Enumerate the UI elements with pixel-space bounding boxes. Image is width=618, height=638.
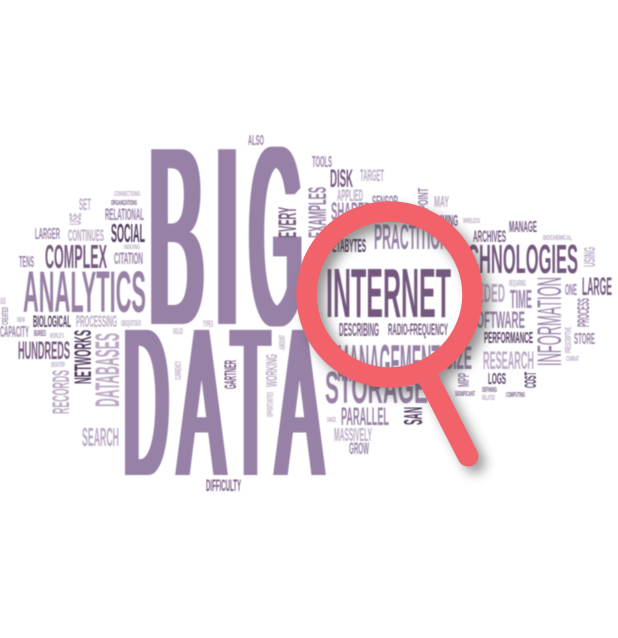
heading word: BIG: I — [214, 94, 240, 378]
word cloud: left cluster: RECORDS — [48, 370, 75, 414]
word cloud: right cluster: USING — [582, 247, 599, 267]
word cloud: left cluster: TYPES — [203, 319, 213, 329]
word cloud: left cluster: OPPORTUNITIES — [266, 392, 275, 417]
word cloud: right cluster: PRESCRIPTIVE — [564, 327, 573, 353]
word cloud: left cluster: AMOUNT — [278, 335, 287, 350]
word cloud: left cluster: WORLD'S — [50, 333, 64, 340]
word cloud: right cluster: COMBAT — [566, 356, 579, 363]
word cloud: left cluster: PROCESSING — [76, 312, 117, 331]
word cloud: left cluster: ANALYTICS — [23, 260, 146, 325]
text: G — [250, 94, 302, 378]
word cloud: left cluster: SOLID — [173, 327, 183, 336]
word cloud: left cluster: ALSO — [248, 133, 264, 149]
word cloud: left cluster: RELATIONAL — [105, 205, 144, 224]
word cloud: right cluster: SINCE — [327, 417, 336, 424]
word cloud: right cluster: REQUIRING — [509, 279, 526, 288]
word cloud: left cluster — [0, 133, 302, 495]
word cloud: right cluster: SOFTWARE — [470, 307, 525, 334]
word cloud: right cluster: SIGNIFICANT — [455, 391, 475, 398]
word cloud: left cluster: EVERY — [274, 207, 302, 238]
word cloud: right cluster: SAN — [398, 407, 428, 425]
word cloud: left cluster: GARTNER — [221, 360, 240, 389]
heading word: DATA: A — [179, 284, 224, 520]
word cloud: right cluster: BIOCHEMICAL — [543, 235, 572, 242]
lens words: DESCRIBING — [339, 320, 379, 340]
word cloud: right cluster: TIME — [510, 284, 532, 314]
word cloud: left cluster: DESKTOP — [51, 362, 65, 369]
word cloud: right cluster: TOOLS — [312, 154, 332, 171]
word cloud: right cluster: TARGET — [360, 166, 384, 185]
heading word: DATA: D — [124, 284, 168, 520]
word cloud: right cluster: COMPUTING — [506, 392, 525, 399]
text: A — [277, 284, 322, 520]
word cloud: left cluster: USE — [66, 213, 85, 225]
word cloud: right cluster: STORAGE — [325, 362, 428, 413]
word cloud: right cluster: SENSOR — [372, 192, 398, 211]
word cloud: right cluster: INFORMATION — [531, 277, 569, 366]
magnifier shadow — [314, 218, 480, 463]
word cloud: right cluster: EXAMPLES — [304, 187, 332, 238]
word cloud: right cluster: GROW — [349, 439, 369, 458]
word cloud: left cluster: CAPACITY — [0, 324, 29, 341]
word cloud: right cluster: POINT — [415, 188, 432, 210]
word cloud: right cluster: PERFORMANCE — [484, 330, 533, 347]
word cloud: left cluster: SOCIAL — [111, 218, 145, 248]
word cloud: right cluster: COST — [521, 372, 540, 388]
word cloud: right cluster: ARCHIVES — [473, 227, 506, 246]
word cloud: left cluster: ORGANIZATIONS — [111, 200, 137, 207]
word cloud: right cluster: PROCESS — [574, 298, 593, 327]
word cloud: right cluster — [304, 154, 612, 458]
word cloud: right cluster: RELATED — [482, 395, 495, 402]
magnifier lens interior — [326, 224, 459, 339]
word cloud: right cluster: SHARED — [331, 198, 371, 226]
word cloud: left cluster: CURRENCY — [174, 361, 183, 380]
word cloud: right cluster: WIRELESS — [463, 218, 480, 225]
word cloud: left cluster: HUNDREDS — [18, 337, 70, 365]
word cloud: right cluster: ONE — [565, 282, 577, 299]
word cloud: left cluster: UBIQUITOUS — [121, 319, 141, 328]
word cloud: left cluster: NETWORKS — [70, 330, 97, 384]
lens words — [326, 224, 452, 368]
word cloud: left cluster: BIOLOGICAL — [33, 312, 71, 331]
word cloud: right cluster: PROGRAMMING — [410, 213, 458, 230]
word cloud: right cluster: DISK — [330, 165, 353, 193]
lens words: RADIO-FREQUENCY — [388, 320, 448, 339]
word cloud: right cluster: MPP — [456, 373, 473, 387]
word cloud: right cluster: PARALLEL — [341, 403, 389, 431]
word cloud: left cluster: CONNECTIONS — [114, 191, 140, 198]
word cloud: left cluster: COMPLEX — [45, 238, 107, 275]
word cloud: right cluster: DEFINING — [482, 387, 497, 394]
word cloud: left cluster: CONTINUES — [68, 226, 104, 245]
word cloud: right cluster: MANAGE — [509, 219, 537, 236]
word cloud: right cluster: SIZE — [445, 340, 472, 376]
word cloud: left cluster: LARGER — [35, 226, 60, 243]
word cloud: left cluster: NEW — [17, 317, 25, 324]
word cloud: left cluster: SED — [0, 297, 6, 306]
word cloud: left cluster: TENS — [19, 254, 34, 271]
word cloud: left cluster: BURIED — [34, 329, 46, 338]
word cloud: right cluster: MAY — [434, 194, 449, 211]
word cloud: right cluster: APPLIED — [337, 186, 363, 205]
word cloud: right cluster: LOGS — [488, 371, 506, 388]
word cloud: left cluster: WORKING — [264, 354, 281, 387]
word cloud: left cluster: SEARCH — [82, 422, 119, 452]
heading word: DATA: T — [232, 284, 269, 520]
word cloud: left cluster: SET — [79, 195, 91, 214]
word cloud: right cluster: MASSIVELY — [334, 425, 372, 445]
word cloud: left cluster: CITATION — [114, 249, 143, 268]
heading word: BIG: B — [149, 94, 204, 378]
word cloud: left cluster: DIFFICULTY — [206, 476, 241, 495]
word cloud: left cluster: INDEXING — [124, 245, 140, 251]
word cloud: right cluster: NEEDED — [463, 278, 505, 308]
word cloud: left cluster: CREATED — [1, 307, 10, 325]
lens words: PETABYTES — [328, 236, 366, 256]
word cloud: left cluster: DATABASES — [89, 333, 127, 407]
icon: magnifying glass — [306, 212, 472, 456]
